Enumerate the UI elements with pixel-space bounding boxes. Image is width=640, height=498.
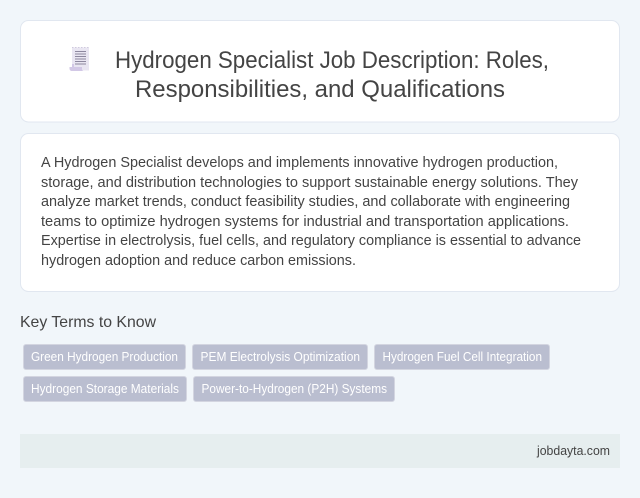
chip: PEM electrolysis optimization <box>192 344 368 370</box>
icon: document scroll <box>70 48 89 71</box>
key term chips <box>24 344 550 402</box>
heading: key terms: Key Terms to Know <box>20 314 156 331</box>
panel: header <box>20 20 620 122</box>
title: Hydrogen Specialist Job Description: Roles, <box>115 47 549 74</box>
footer source text: jobdayta.com <box>536 444 610 458</box>
chip: PEM electrolysis optimization: PEM Electrolysis Optimization <box>200 350 360 364</box>
chip: power-to-hydrogen systems: Power-to-Hydrogen (P2H) Systems <box>202 382 387 396</box>
description text: A Hydrogen Specialist develops and implements innovative hydrogen production, <box>41 155 558 171</box>
chip: hydrogen storage materials: Hydrogen Storage Materials <box>31 382 179 396</box>
panel: description <box>20 134 620 292</box>
chip: green hydrogen production: Green Hydrogen Production <box>31 350 178 364</box>
chip: hydrogen fuel cell integration <box>374 344 550 370</box>
footer bar <box>20 434 620 468</box>
chip: hydrogen fuel cell integration: Hydrogen Fuel Cell Integration <box>382 350 542 364</box>
title <box>115 47 549 103</box>
description text: storage, and distribution technologies to support sustainable energy solutions. They <box>41 175 579 191</box>
description text: Expertise in electrolysis, fuel cells, and regulatory compliance is essential to advance <box>41 233 581 249</box>
title: Responsibilities, and Qualifications <box>135 76 505 103</box>
description text: teams to optimize hydrogen systems for industrial and transportation applications. <box>41 214 569 230</box>
chip: green hydrogen production <box>24 344 186 370</box>
chip: hydrogen storage materials <box>24 376 186 402</box>
description text: analyze market trends, conduct feasibility studies, and collaborate with engineering <box>41 194 570 210</box>
description text <box>41 155 581 269</box>
description text: hydrogen adoption and reduce carbon emissions. <box>41 253 356 269</box>
chip: power-to-hydrogen systems <box>194 376 394 402</box>
